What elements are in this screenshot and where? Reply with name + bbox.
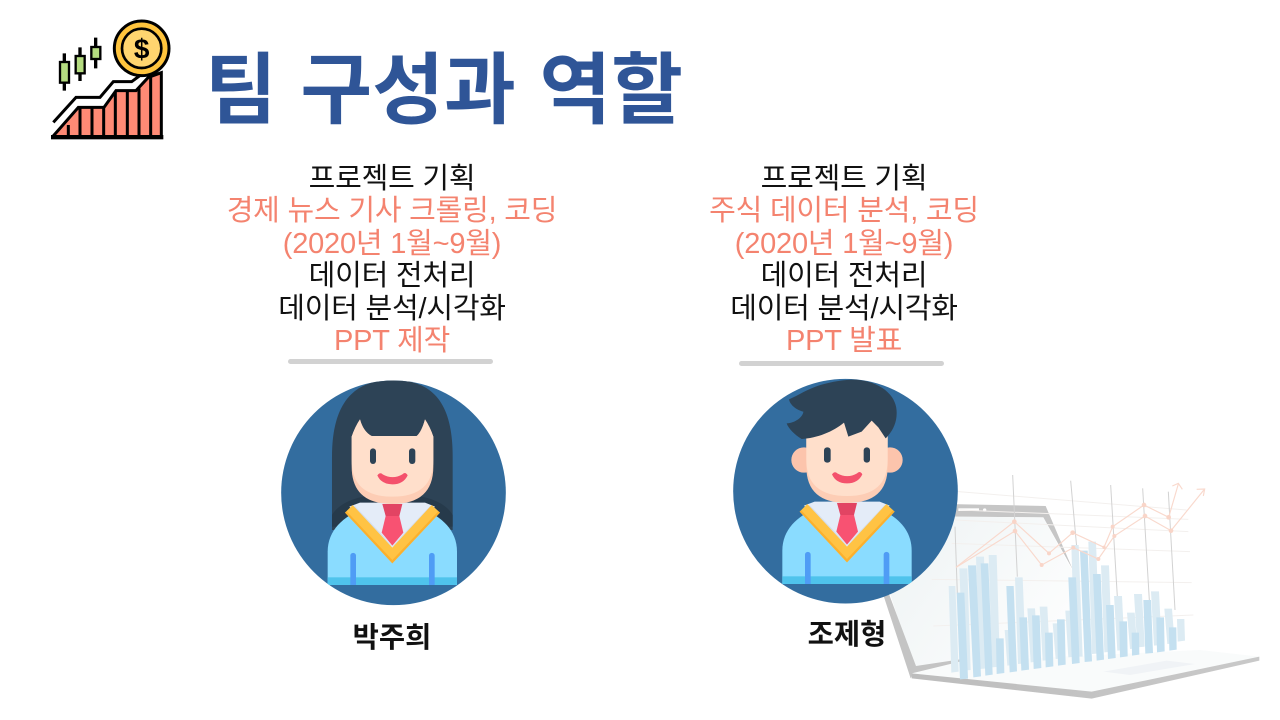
panel: role list 2: [709, 163, 979, 357]
panel: role list 1: [227, 163, 557, 357]
panel: role list 2: 데이터 분석/시각화: [730, 293, 958, 325]
icon: male avatar: [733, 378, 958, 604]
panel: role list 1: 데이터 전처리: [309, 260, 475, 292]
panel: role list 1: 데이터 분석/시각화: [278, 293, 506, 325]
panel: role list 2: (2020년 1월~9월): [735, 228, 953, 260]
panel: role list 2: 프로젝트 기획: [761, 163, 927, 195]
panel: role list 1: PPT 제작: [334, 325, 450, 357]
icon: stock chart with coin: [51, 20, 170, 140]
name: 조제형: 조제형: [808, 619, 886, 651]
icon: stock chart with coin: $: [134, 33, 150, 64]
panel: role list 1: (2020년 1월~9월): [283, 228, 501, 260]
icon: female avatar: [281, 380, 506, 606]
panel: role list 1: 경제 뉴스 기사 크롤링, 코딩: [227, 195, 557, 227]
panel: role list 2: PPT 발표: [786, 325, 902, 357]
panel: role list 1: 프로젝트 기획: [309, 163, 475, 195]
panel: role list 2: 데이터 전처리: [761, 260, 927, 292]
name: 박주희: 박주희: [353, 622, 431, 654]
title: 팀 구성과 역할: [205, 46, 683, 134]
panel: role list 2: 주식 데이터 분석, 코딩: [709, 195, 979, 227]
